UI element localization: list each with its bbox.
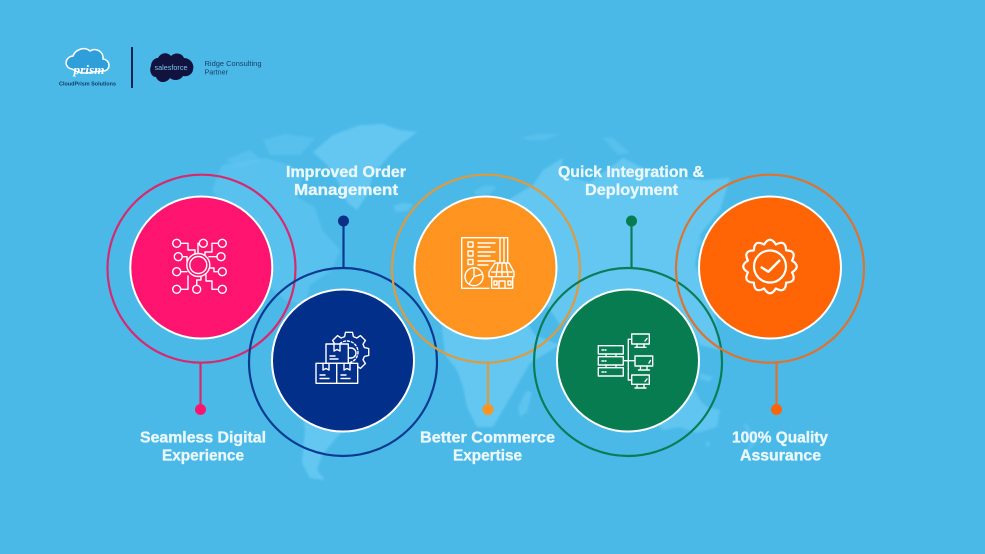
label: 100% Quality	[732, 430, 828, 447]
disc	[130, 196, 272, 338]
logo: CloudPrism Solutions	[59, 49, 116, 88]
ring	[392, 175, 580, 363]
icon: quality badge	[743, 240, 797, 293]
panel: better commerce expertise	[392, 175, 580, 465]
label: Assurance	[740, 448, 821, 465]
panel: 100% quality assurance	[676, 175, 864, 465]
disc	[557, 290, 699, 432]
connector dot	[338, 216, 349, 226]
logo: salesforce partner	[150, 53, 262, 82]
panel: seamless digital experience	[108, 175, 296, 465]
partner text: Partner	[204, 68, 229, 76]
ring	[249, 268, 437, 456]
connector	[199, 363, 202, 409]
world map backdrop	[212, 124, 757, 480]
logo divider	[131, 47, 133, 88]
company name: CloudPrism Solutions	[59, 82, 116, 88]
ring	[534, 268, 722, 456]
connector	[630, 221, 633, 268]
connector dot	[771, 404, 782, 415]
prism wordmark: prism	[72, 62, 104, 77]
ring	[108, 175, 296, 363]
connector	[775, 363, 778, 409]
label: Better Commerce	[420, 430, 555, 447]
connector dot	[195, 404, 206, 415]
connector dot	[626, 216, 637, 226]
icon: salesforce cloud	[150, 53, 193, 82]
partner text: Ridge Consulting	[204, 59, 262, 68]
disc	[272, 290, 414, 432]
icon: prism cloud	[66, 49, 109, 73]
disc	[414, 196, 556, 338]
panel: quick integration and deployment	[534, 164, 722, 456]
label: Improved Order	[286, 164, 406, 181]
label: Deployment	[585, 182, 678, 199]
ring	[676, 175, 864, 363]
panel: improved order management	[249, 164, 437, 456]
icon: circuit chip	[173, 239, 226, 293]
label: Expertise	[453, 448, 522, 465]
label: Experience	[162, 448, 244, 465]
salesforce wordmark: salesforce	[154, 63, 188, 72]
icon: servers and monitors	[598, 334, 653, 388]
connector dot	[482, 404, 494, 415]
label: Seamless Digital	[140, 430, 266, 447]
label: Management	[294, 182, 398, 199]
disc	[699, 196, 841, 338]
label: Quick Integration &	[558, 164, 704, 181]
icon: report and storefront	[462, 238, 514, 288]
icon: boxes and gear	[316, 332, 369, 383]
connector	[487, 363, 489, 409]
connector	[342, 221, 345, 268]
